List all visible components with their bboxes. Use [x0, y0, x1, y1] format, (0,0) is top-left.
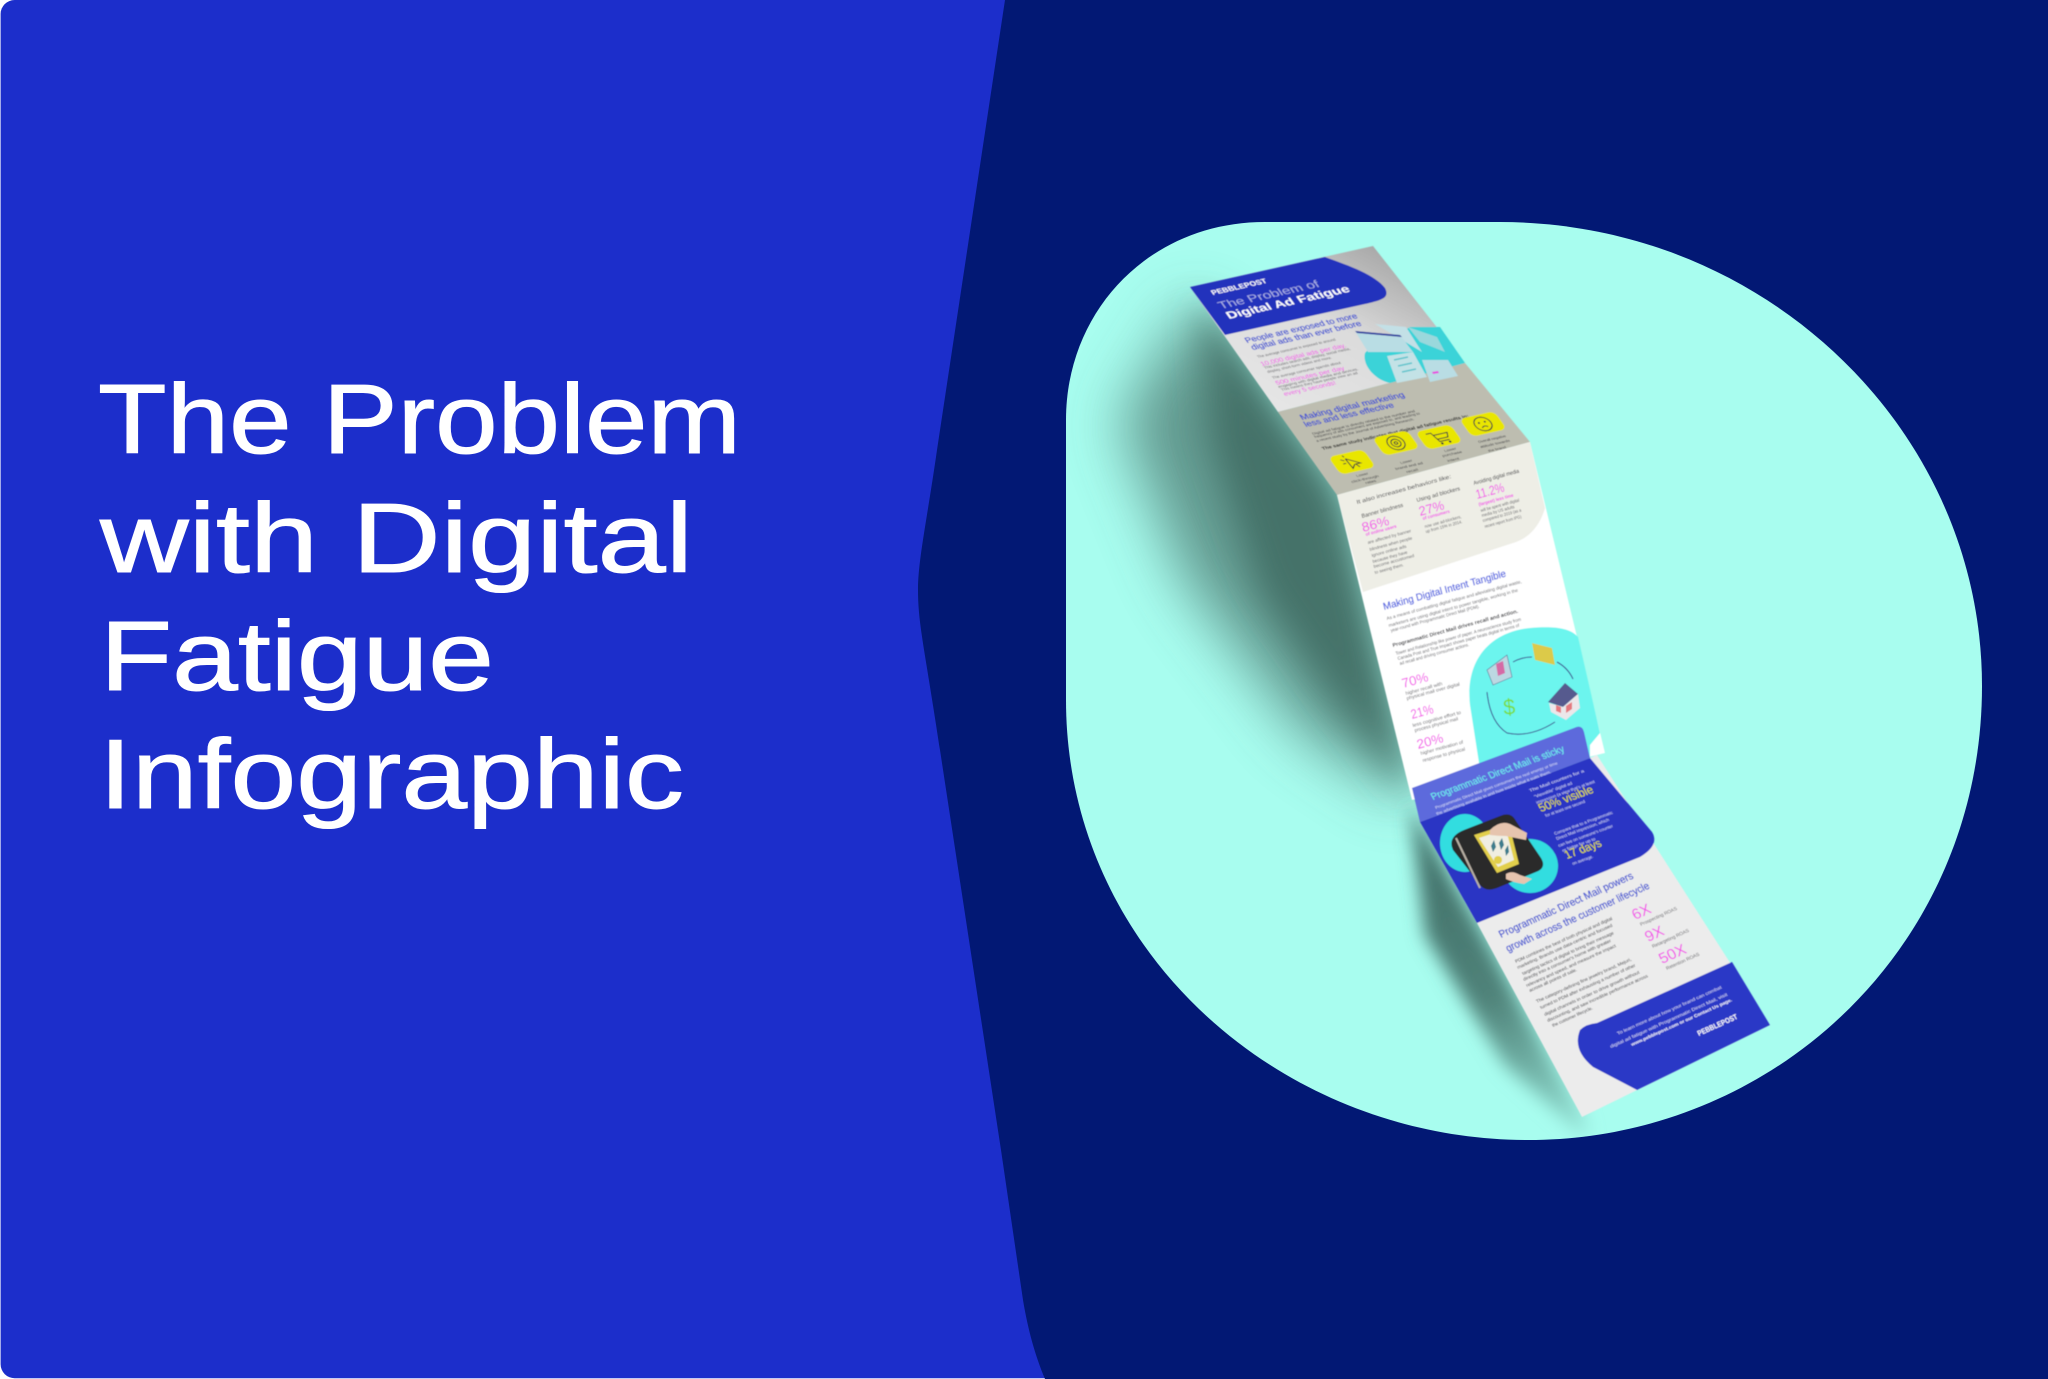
ROAS stats: 6X	[1629, 901, 1654, 924]
behaviors stats: It also increases behaviors like:	[1356, 474, 1453, 506]
tangible heading and copy: Tower and Relationship like power of paper. A neuroscience study from	[1395, 617, 1522, 656]
exposure heading and copy: People are exposed to more	[1242, 311, 1360, 345]
behaviors stats: (largest) less time	[1478, 492, 1514, 507]
behaviors stats: Avoiding digital media	[1473, 468, 1521, 487]
paper surface	[1190, 246, 1465, 412]
panel: top fold	[1190, 246, 1530, 495]
tangible heading and copy: year-round with Programmatic Direct Mail (PDM).	[1390, 604, 1480, 633]
icon: shopping cart	[1415, 424, 1463, 450]
periwinkle header band	[1412, 727, 1590, 822]
panel: customer lifecycle	[1497, 871, 1770, 1090]
panel: middle fold	[1337, 442, 1605, 800]
behaviors stats: blindness when people	[1369, 535, 1413, 552]
white paper surface	[1337, 442, 1605, 800]
icon captions: Lower	[1355, 472, 1370, 478]
icon captions: Overall negative	[1477, 434, 1507, 444]
visibility stats: 17 days	[1562, 836, 1604, 862]
icon captions: the brand	[1487, 446, 1507, 453]
marketing heading and copy: a recent study by the Journal of Advertising Research.	[1315, 418, 1415, 443]
ROAS stats: Retention ROAS	[1665, 952, 1701, 972]
behaviors stats: ignore online ads	[1371, 543, 1408, 558]
lifecycle copy: PDM combines the best of both physical and digital	[1514, 916, 1613, 964]
visibility stats: Compare that to a Programmatic	[1553, 810, 1614, 836]
icon captions: recall	[1405, 468, 1420, 474]
behaviors stats: 27%	[1417, 497, 1446, 519]
visibility stats: on average.	[1571, 854, 1594, 866]
lifecycle copy: digital channels in order to drive growth without	[1543, 970, 1641, 1017]
tangible heading and copy: Programmatic Direct Mail drives recall and action.	[1392, 609, 1519, 649]
tangible heading and copy: Canada Post and True Impact shows paper beats digital in terms of	[1397, 623, 1520, 661]
recall stats: higher recall with	[1405, 681, 1443, 697]
exposure heading and copy: digital ads than ever before	[1248, 319, 1364, 352]
tangible heading and copy	[1382, 568, 1522, 666]
lifecycle copy: turned to PDM after exhausting a number of other	[1539, 963, 1637, 1010]
header text: Digital Ad Fatigue	[1224, 284, 1353, 321]
blue band	[1420, 758, 1654, 923]
icon captions: Lower	[1443, 447, 1458, 453]
fridge photo with cyan blob	[1440, 814, 1558, 893]
left blue background panel	[1, 0, 1301, 1378]
behaviors stats: will be spent with digital	[1480, 498, 1520, 513]
tangible heading and copy: ad recall and driving consumer actions.	[1399, 642, 1470, 666]
visibility stats	[1528, 768, 1614, 866]
exposure heading and copy: 10,000 digital ads per day.	[1259, 343, 1348, 368]
header text: PEBBLEPOST	[1209, 277, 1269, 297]
marketing heading and copy: The same study indicates that digital ad fatigue results in:	[1321, 414, 1471, 452]
marketing heading and copy: frequency of ads consumers are exposed to, and leading to	[1313, 412, 1421, 439]
visibility stats: The Mail counters for a	[1528, 768, 1586, 793]
marketing heading and copy	[1297, 390, 1471, 452]
folded infographic leaflet mockup	[1190, 246, 1770, 1117]
behaviors stats: 11.2%	[1474, 480, 1506, 502]
exposure heading and copy: This means they have people view an ad	[1280, 371, 1359, 392]
icon: brain spiral	[1372, 430, 1420, 456]
lifecycle copy: targeting tactics of digital to bring their message	[1521, 930, 1615, 976]
behaviors stats: recent report from IPG)	[1484, 514, 1522, 529]
sticky heading: Programmatic Direct Mail gives consumers the real energy or time	[1434, 760, 1559, 810]
paper cast shadow	[1120, 300, 1588, 1140]
behaviors stats: media by US adults	[1481, 504, 1516, 518]
exposure heading and copy: This includes search ads, display, social media,	[1263, 346, 1351, 370]
behaviors stats: are affected by banner	[1367, 528, 1412, 545]
ROAS stats: Prospecting ROAS	[1639, 906, 1678, 928]
behaviors stats: compared to 2019 (as a	[1482, 507, 1522, 523]
lifecycle heading: growth across the customer lifecycle	[1504, 881, 1652, 955]
header text	[1209, 277, 1353, 321]
lifecycle copy: the customer lifecycle.	[1551, 1005, 1594, 1028]
icon captions: attitude towards	[1479, 439, 1511, 449]
visibility stats: impression (a view that's at least	[1535, 779, 1596, 805]
lifecycle copy: marketing. Brands use data-centric and focused	[1516, 923, 1614, 970]
khaki band	[1278, 363, 1530, 495]
title: Infographic	[99, 719, 684, 829]
panel: direct mail is sticky	[1412, 727, 1654, 923]
visibility stats: for at least one second	[1544, 799, 1587, 818]
marketing heading and copy: Making digital marketing	[1297, 390, 1407, 422]
behaviors stats: Banner blindness	[1361, 503, 1404, 520]
lifecycle copy: discounting, and saw incredible performance across	[1546, 973, 1649, 1023]
behaviors stats: now use ad-blockers,	[1424, 514, 1462, 529]
icon captions: Lower	[1399, 459, 1414, 465]
ROAS stats: 50X	[1656, 941, 1689, 968]
icon: unhappy face	[1459, 411, 1507, 437]
icon: cursor	[1328, 449, 1376, 475]
behaviors stats: to seeing them.	[1374, 562, 1404, 575]
recall stats: less cognitive effort to	[1412, 710, 1462, 729]
exposure heading and copy	[1242, 311, 1364, 398]
recall stats: process physical mail	[1414, 716, 1459, 734]
behaviors stats: up from 15% in 2014.	[1425, 519, 1463, 534]
title: with Digital	[99, 483, 693, 593]
behaviors stats	[1356, 468, 1522, 575]
icon captions: purchase	[1441, 450, 1463, 458]
recall stats: higher motivation of	[1420, 739, 1465, 757]
footer copy: www.pebblepost.com or our Contact Us page.	[1629, 997, 1733, 1047]
right navy background panel	[918, 0, 2048, 1379]
sticky heading: the advertising available in and how inside what it suits them.	[1435, 769, 1552, 816]
footer copy: PEBBLEPOST	[1696, 1012, 1739, 1038]
lifecycle copy	[1514, 916, 1649, 1028]
visibility stats: Direct Mail impression, which	[1555, 817, 1611, 841]
behaviors stats: become accustomed	[1373, 553, 1415, 569]
exposure heading and copy: engaging with digital media and devices.	[1277, 367, 1360, 389]
header text: The Problem of	[1216, 279, 1323, 311]
icon captions: click-through	[1350, 474, 1380, 484]
lifecycle copy: directly into a consumer's home with greater	[1522, 938, 1612, 982]
exposure heading and copy: every 5 seconds!	[1282, 380, 1338, 398]
exposure heading and copy: The average consumer spends about	[1271, 360, 1343, 380]
panel: bottom gray sheet	[1420, 755, 1770, 1117]
icon captions	[1350, 434, 1511, 485]
icon captions: intent	[1446, 457, 1460, 463]
behaviors stats: of consumers	[1422, 509, 1451, 521]
mint blob background	[1066, 222, 1982, 1140]
ROAS stats	[1629, 901, 1701, 972]
visibility stats: "Viewable" digital ad	[1533, 780, 1574, 799]
recall stats: 21%	[1409, 701, 1435, 722]
icon captions: rates	[1364, 479, 1378, 485]
lifecycle copy: The category-defining fine jewelry brand, Mejuri,	[1535, 957, 1632, 1004]
recall stats: response to physical	[1422, 746, 1466, 764]
cyan arch with purchase cycle	[1469, 627, 1600, 782]
footer copy	[1609, 984, 1739, 1049]
lifecycle copy: relevancy and speed, and measure the impact	[1525, 943, 1618, 988]
tangible heading and copy: As a means of combatting digital fatigue and alleviating digital waste,	[1386, 579, 1522, 621]
browser windows illustration	[1355, 324, 1465, 383]
visibility stats: 50% visible	[1536, 783, 1596, 815]
blue call to action footer	[1578, 962, 1770, 1090]
behaviors stats: 86%	[1360, 513, 1391, 535]
visibility stats: can live on someone's counter	[1557, 823, 1614, 848]
behaviors stats: Using ad blockers	[1416, 486, 1461, 504]
title	[98, 364, 741, 829]
tangible heading and copy: marketers are using digital intent to power tangible, working in the	[1388, 587, 1519, 628]
marketing heading and copy: Digital ad fatigue is directly related to the number and	[1311, 409, 1416, 436]
exposure heading and copy: The average consumer is exposed to around	[1256, 337, 1337, 359]
exposure heading and copy: 500 minutes per day	[1274, 365, 1347, 387]
cyan arch with purchase cycle: $	[1502, 694, 1516, 720]
lifecycle heading: Programmatic Direct Mail powers	[1497, 871, 1636, 941]
sticky heading: Programmatic Direct Mail is sticky	[1429, 744, 1567, 803]
beige stats area	[1337, 442, 1545, 592]
behaviors stats: because they have	[1372, 549, 1408, 564]
recall stats: physical mail over digital	[1406, 682, 1461, 702]
title: Fatigue	[100, 601, 494, 711]
recall stats: 20%	[1415, 730, 1445, 752]
lifecycle copy: across all points of sale.	[1528, 967, 1578, 993]
ROAS stats: Retargeting ROAS	[1651, 928, 1690, 950]
behaviors stats: of online users	[1365, 524, 1398, 537]
ROAS stats: 9X	[1642, 923, 1667, 946]
tangible heading and copy: Making Digital Intent Tangible	[1382, 568, 1508, 613]
icon captions: brand and ad	[1394, 461, 1424, 471]
blue header shape	[1190, 257, 1386, 335]
footer copy: digital ad fatigue with Programmatic Direct Mail, visit	[1609, 992, 1729, 1049]
title: The Problem	[98, 364, 741, 474]
footer copy: To learn more about how your brand can combat	[1616, 984, 1723, 1036]
recall stats: 70%	[1400, 669, 1430, 691]
exposure heading and copy: display, short-form videos and more.	[1266, 355, 1333, 374]
visibility stats: or fridge for up to	[1561, 836, 1597, 853]
recall stats	[1400, 669, 1466, 764]
marketing heading and copy: less and less effective	[1301, 400, 1396, 429]
